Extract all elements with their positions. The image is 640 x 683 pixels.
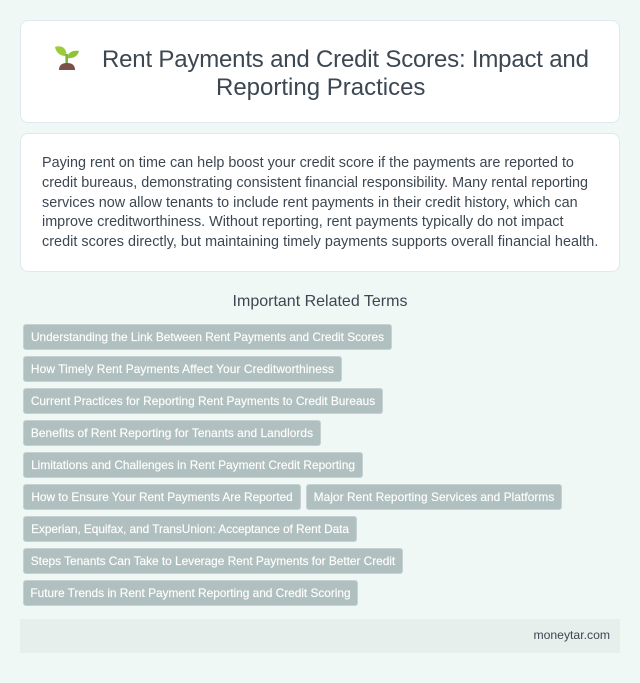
tag: Steps Tenants Can Take to Leverage Rent Payments for Better Credit (31, 554, 395, 568)
tag: How Timely Rent Payments Affect Your Creditworthiness (31, 362, 334, 376)
intro paragraph: improve creditworthiness. Without reporting, rent payments typically do not impact (42, 214, 564, 230)
intro text panel (20, 133, 620, 272)
tag (23, 484, 301, 510)
tag (23, 356, 342, 382)
tag: Understanding the Link Between Rent Payments and Credit Scores (31, 330, 384, 344)
intro paragraph: Paying rent on time can help boost your credit score if the payments are reported to (42, 155, 574, 171)
tag (23, 452, 363, 478)
tag: Limitations and Challenges in Rent Payment Credit Reporting (31, 458, 355, 472)
tag: Benefits of Rent Reporting for Tenants and Landlords (31, 426, 313, 440)
tag (23, 580, 358, 606)
tag (23, 420, 321, 446)
intro paragraph (42, 155, 598, 250)
tag: How to Ensure Your Rent Payments Are Reported (31, 490, 293, 504)
tag (23, 516, 357, 542)
title (102, 46, 589, 101)
footer bar (20, 619, 620, 653)
header panel (20, 20, 620, 123)
tag: Current Practices for Reporting Rent Payments to Credit Bureaus (31, 394, 375, 408)
related terms tags (23, 324, 562, 606)
section heading: Important Related Terms (233, 293, 407, 310)
footer source: moneytar.com (533, 628, 610, 642)
intro paragraph: credit scores directly, but maintaining timely payments supports overall financial health. (42, 234, 598, 250)
tag: Future Trends in Rent Payment Reporting and Credit Scoring (30, 586, 351, 600)
title: Reporting Practices (216, 74, 425, 101)
tag (23, 548, 403, 574)
icon: seedling (55, 46, 79, 70)
title: Rent Payments and Credit Scores: Impact and (102, 46, 589, 73)
intro paragraph: credit bureaus, demonstrating consistent financial responsibility. Many rental reporting (42, 175, 588, 191)
tag (306, 484, 562, 510)
tag (23, 388, 383, 414)
tag: Major Rent Reporting Services and Platforms (314, 490, 554, 504)
tag: Experian, Equifax, and TransUnion: Acceptance of Rent Data (31, 522, 349, 536)
tag (23, 324, 392, 350)
intro paragraph: services now allow tenants to include rent payments in their credit history, which can (42, 195, 578, 211)
